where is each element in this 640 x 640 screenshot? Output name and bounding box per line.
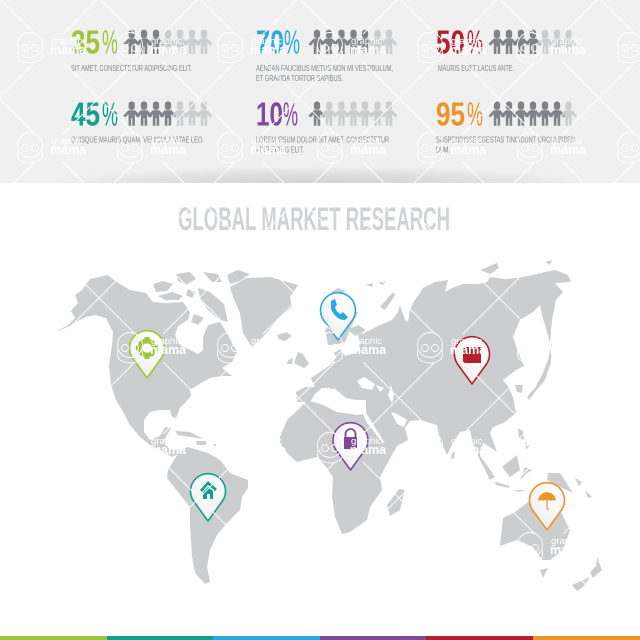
Arctic islands [153,270,292,341]
pin: house [190,474,226,521]
pin: umbrella [530,483,564,530]
Arctic Eurasian islands [331,260,552,310]
Africa [280,400,400,534]
stat: 50 percent: % [467,24,483,60]
world map [55,260,602,591]
New Guinea [547,473,592,498]
stat: 35 percent: 35 [71,24,100,60]
stat: 35 percent [71,24,212,73]
inland seas [320,377,407,427]
stat: 50 percent: MAURIS EGET LACUS ANTE. [438,63,514,73]
bottom colour strip [0,636,640,640]
stat: 50 percent: 50 [436,24,465,60]
stat: 35 percent: SIT AMET, CONSECTETUR ADIPISCING ELIT. [71,63,192,73]
stat: 70 percent: 70 [256,24,284,60]
Japan [515,342,552,400]
Greenland [230,277,298,347]
stat: 45 percent: QUISQUE MAURIS QUAM, VEHICULA VITAE LEO. [71,135,204,145]
panel: statistics header [0,0,640,183]
stat: 45 percent: % [102,96,118,133]
stat: 70 percent [256,24,398,83]
stat: 95 percent: 95 [436,96,465,133]
stat: 95 percent: % [467,96,483,133]
stat: 45 percent: 45 [71,96,100,133]
Eurasia [296,270,571,478]
stat: 10 percent: 10 [256,96,283,133]
stat: 70 percent: AENEAN FAUCIBUS METUS NON MI VESTIBULUM, [256,63,393,73]
stat: 45 percent [71,96,212,145]
stat: 95 percent: DUM. [436,145,450,155]
stat: 10 percent: % [283,96,298,133]
stat: 10 percent [256,96,398,155]
pin: briefcase [454,337,490,384]
North America [55,275,237,457]
Southeast Asia islands [451,428,532,492]
Caribbean islands [175,431,216,447]
Tasmania and New Zealand [540,557,602,591]
pin: phone [320,293,356,340]
Madagascar [387,489,405,516]
stat: 70 percent: ET GRAVIDA TORTOR SAPIBUS. [256,73,343,83]
stat: 70 percent: % [284,24,300,60]
title: GLOBAL MARKET RESEARCH [178,201,450,237]
stat: 50 percent [436,24,577,73]
stat: 35 percent: % [102,24,118,60]
stat: 10 percent: LOREM IPSUM DOLOR SIT AMET, CONSECTETUR [256,135,389,145]
pin: padlock [333,423,368,470]
South America [167,447,248,584]
Scandinavia and UK [287,310,366,368]
pin: gear [130,331,164,378]
Australia [500,502,570,560]
stat: 95 percent [436,96,577,155]
stat: 10 percent: ADIPISCING ELIT. [256,145,304,155]
